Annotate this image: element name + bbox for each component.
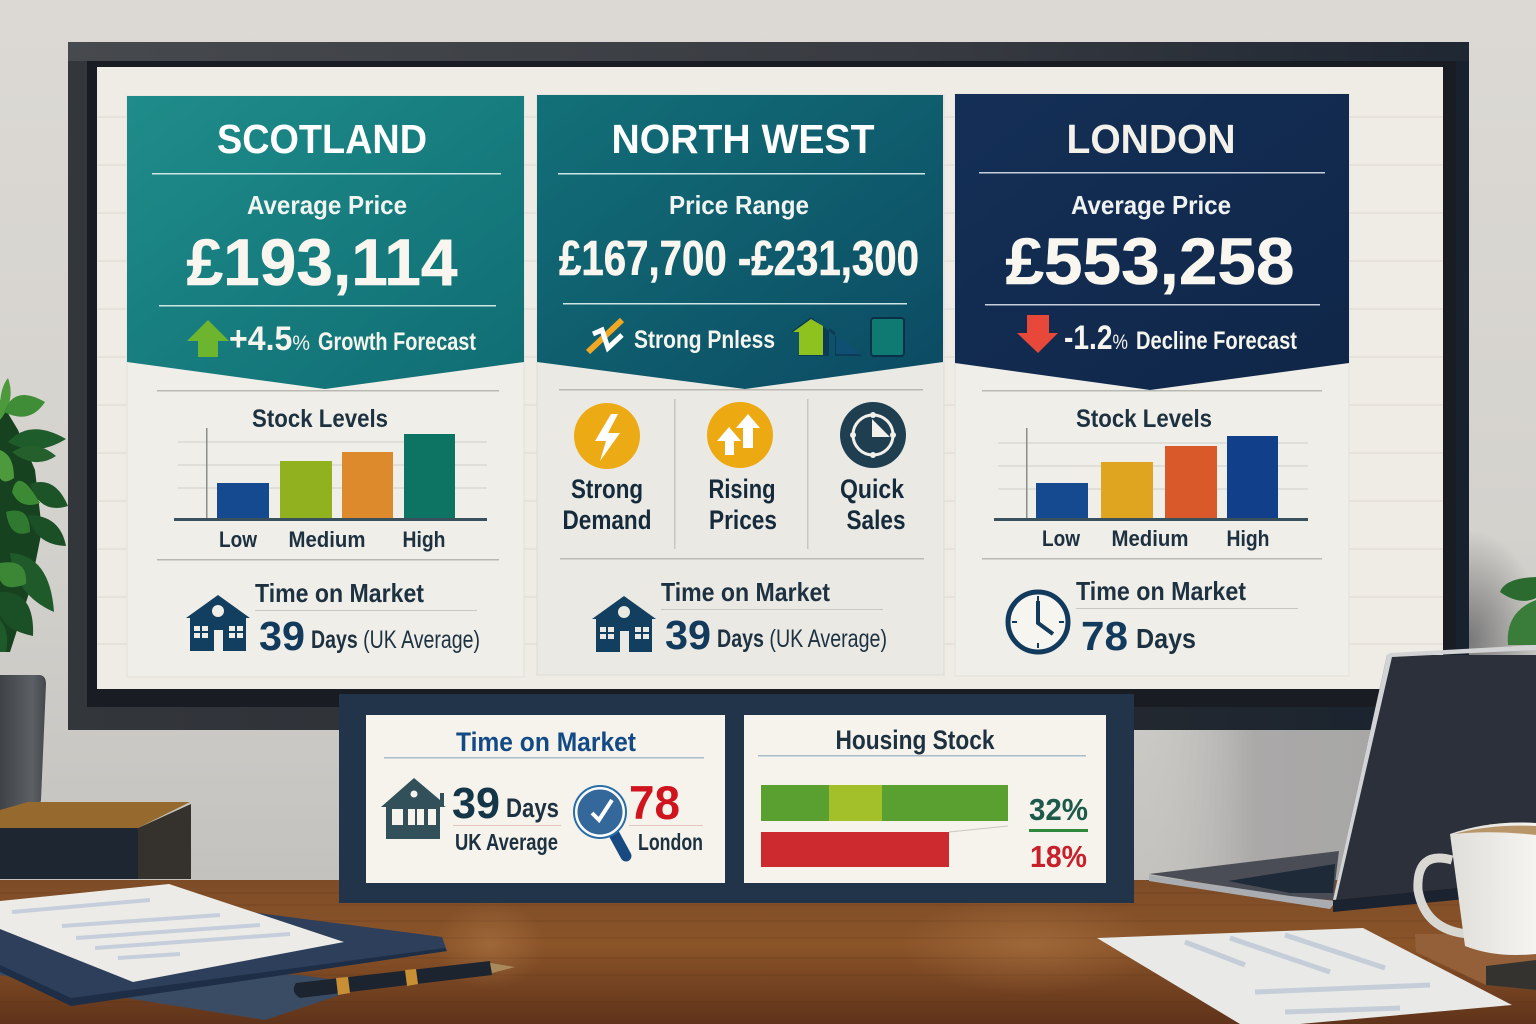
bar chart: stock levels: Medium bbox=[1112, 526, 1188, 551]
right plant bbox=[1500, 577, 1536, 645]
panel: North West: Sales bbox=[846, 505, 906, 535]
panel header: London bbox=[955, 94, 1349, 390]
panel: time on market bbox=[366, 715, 725, 883]
heading: London: LONDON bbox=[1066, 116, 1236, 162]
label: average price: Average Price bbox=[247, 190, 407, 220]
icon: green up arrow bbox=[187, 320, 229, 357]
heading: North West: NORTH WEST bbox=[612, 116, 874, 162]
desk bbox=[0, 880, 1536, 1024]
panel header: North West bbox=[537, 95, 943, 389]
panel: time on market: London bbox=[638, 829, 703, 855]
side table bbox=[0, 802, 191, 879]
label: average price: Average Price bbox=[1071, 190, 1231, 220]
value: 78 days: 78 bbox=[1081, 613, 1128, 659]
panel header: Scotland bbox=[127, 96, 524, 389]
value: 32%: 32% bbox=[1029, 792, 1088, 827]
heading: housing stock: Housing Stock bbox=[836, 725, 995, 755]
documents and folder bbox=[0, 884, 447, 1020]
icon: trend arrow bbox=[588, 320, 622, 352]
label: time on market: Time on Market bbox=[661, 577, 830, 607]
bar chart: stock levels bbox=[994, 428, 1308, 551]
document on desk bbox=[1097, 928, 1512, 1024]
panel: London bbox=[955, 94, 1349, 676]
bar chart: stock levels: Medium bbox=[288, 527, 366, 552]
decline forecast: -1.2% bbox=[1064, 319, 1128, 357]
panel: North West bbox=[537, 95, 944, 675]
label: quick sales: Quick bbox=[840, 474, 905, 504]
panel: North West: Demand bbox=[562, 505, 652, 535]
value: average price: £193,114 bbox=[186, 225, 458, 299]
icon: strong demand bbox=[574, 403, 640, 469]
panel: North West: Days (UK Average) bbox=[717, 625, 887, 653]
label: price range: Price Range bbox=[669, 190, 809, 220]
icon: clock bbox=[1008, 592, 1068, 652]
panel: Scotland: Growth Forecast bbox=[318, 328, 477, 356]
growth forecast: +4.5% bbox=[229, 320, 310, 358]
label: strong demand: Strong bbox=[571, 474, 643, 504]
label: time on market: Time on Market bbox=[255, 578, 424, 608]
label: time on market: Time on Market bbox=[1076, 576, 1246, 606]
panel: London: Days bbox=[1136, 623, 1196, 654]
panel: time on market: Days bbox=[506, 793, 559, 823]
icon: magnifier bbox=[574, 786, 626, 856]
icon: quick sales bbox=[840, 402, 906, 468]
plant pot bbox=[0, 675, 46, 818]
icon: rising prices bbox=[707, 402, 773, 468]
bar: 18% bbox=[761, 826, 1008, 867]
heading: stock levels: Stock Levels bbox=[252, 405, 388, 433]
icon: red down arrow bbox=[1017, 315, 1058, 353]
heading: time on market: Time on Market bbox=[456, 727, 636, 757]
heading: stock levels: Stock Levels bbox=[1076, 405, 1212, 433]
main board frame bbox=[68, 42, 1469, 730]
label: strong price growth: Strong Pnless bbox=[634, 326, 775, 354]
value: 39 days UK average: 39 bbox=[452, 779, 500, 828]
panel: housing stock bbox=[744, 715, 1106, 883]
panel: North West: Prices bbox=[709, 505, 777, 535]
bar chart: stock levels bbox=[174, 428, 487, 552]
value: price range: £167,700 -£231,300 bbox=[559, 232, 919, 286]
value: average price: £553,258 bbox=[1006, 224, 1294, 298]
value: 78 London: 78 bbox=[629, 776, 680, 829]
bar chart: stock levels: Low bbox=[219, 527, 258, 552]
value: 18%: 18% bbox=[1030, 839, 1087, 874]
laptop bbox=[1149, 645, 1536, 912]
label: rising prices: Rising bbox=[708, 474, 776, 504]
panel: lower board frame bbox=[339, 694, 1134, 903]
heading: Scotland: SCOTLAND bbox=[217, 116, 427, 162]
coffee mug and coaster bbox=[1415, 822, 1536, 990]
panel: Scotland: Days (UK Average) bbox=[311, 626, 480, 654]
plant bbox=[0, 378, 68, 652]
bar chart: stock levels: High bbox=[402, 527, 446, 552]
panel: Scotland bbox=[127, 96, 524, 677]
icon: house bbox=[186, 595, 250, 651]
bar: 32% bbox=[761, 785, 1008, 821]
bar chart: stock levels: High bbox=[1226, 526, 1270, 551]
pen bbox=[294, 961, 515, 998]
bar chart: stock levels: Low bbox=[1042, 526, 1081, 551]
value: 39 days: 39 bbox=[665, 612, 711, 658]
panel: London: Decline Forecast bbox=[1136, 327, 1298, 355]
icon: mini houses bbox=[791, 317, 904, 356]
icon: house bbox=[381, 778, 446, 839]
value: 39 days: 39 bbox=[259, 613, 305, 659]
panel: time on market: UK Average bbox=[455, 829, 558, 855]
icon: house bbox=[592, 596, 656, 652]
